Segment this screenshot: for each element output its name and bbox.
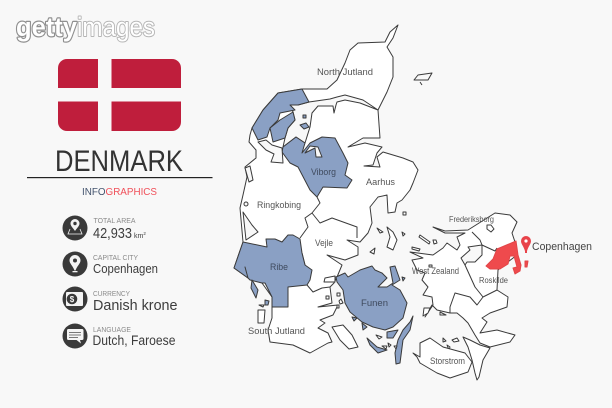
map labels: Vejle	[315, 238, 333, 248]
map labels: Storstrom	[430, 356, 465, 366]
stat: total area: 42,933	[93, 226, 132, 242]
region: Thy	[252, 89, 309, 140]
icon: map pin	[62, 252, 88, 276]
stat: currency: CURRENCY	[93, 291, 130, 298]
stat: total area: 2	[143, 231, 146, 236]
region: Funen	[336, 266, 407, 330]
title: DENMARK	[55, 145, 183, 178]
icon: red location pin	[521, 236, 531, 253]
islands: south Jutland	[259, 276, 358, 349]
region: Mors	[270, 112, 295, 142]
stat: total area: TOTAL AREA	[94, 218, 136, 225]
map labels	[248, 67, 508, 366]
map labels: West Zealand	[412, 266, 459, 276]
stat: language	[62, 324, 176, 348]
region: Ribe	[234, 235, 312, 307]
stat: capital city: CAPITAL CITY	[93, 255, 138, 262]
island: Laeso	[414, 73, 432, 85]
stat: capital city	[62, 252, 158, 276]
Isefjord	[461, 245, 482, 265]
stat: total area: km	[134, 233, 143, 240]
islands: Samso and small	[258, 212, 430, 323]
map labels: North Jutland	[317, 67, 373, 77]
island: Langeland	[395, 316, 413, 364]
callout: Copenhagen: Copenhagen	[532, 241, 592, 253]
map labels: Viborg	[311, 167, 336, 177]
stat: capital city: Copenhagen	[93, 262, 158, 276]
region: Copenhagen	[486, 241, 528, 274]
map labels: Ringkobing	[257, 200, 301, 210]
map labels: Roskilde	[479, 275, 508, 285]
map labels: Funen	[361, 298, 388, 308]
watermark logo	[16, 12, 155, 42]
region: inner borders Jutland	[300, 197, 357, 292]
stat: currency	[62, 286, 178, 314]
map of Denmark	[234, 25, 528, 380]
stat: language: Dutch, Faroese	[92, 333, 176, 348]
stat: language: LANGUAGE	[93, 327, 131, 334]
subtitle: INFOGRAPHICS	[82, 186, 157, 198]
region: Jutland mainland	[234, 25, 418, 353]
bay in Viborg	[305, 146, 322, 157]
map labels: Aarhus	[366, 177, 395, 187]
title underline	[27, 177, 212, 178]
islands: Zealand	[412, 240, 459, 350]
region: Storstrom	[413, 338, 472, 378]
island: Aero	[367, 338, 387, 353]
map labels: South Jutland	[248, 326, 305, 336]
watermark logo: images	[77, 12, 155, 42]
region: Falster	[463, 337, 490, 380]
icon: area pin	[62, 216, 88, 240]
watermark logo: getty	[16, 12, 77, 42]
map labels: Ribe	[270, 262, 288, 272]
icon: banknote: $	[70, 295, 75, 304]
stat: total area	[62, 216, 146, 242]
small blue islands	[352, 277, 405, 338]
map labels: Frederiksborg	[449, 215, 494, 224]
region: Zealand inner borders	[450, 225, 497, 313]
icon: speech bubble	[62, 324, 88, 348]
region: Viborg	[282, 137, 352, 197]
west coast lagoons	[243, 140, 283, 240]
blue islands near Ribe	[251, 280, 269, 305]
flag of Denmark	[58, 59, 181, 131]
region: Limfjord	[283, 95, 378, 147]
region: Zealand	[410, 213, 517, 347]
stat: currency: Danish krone	[93, 298, 178, 314]
